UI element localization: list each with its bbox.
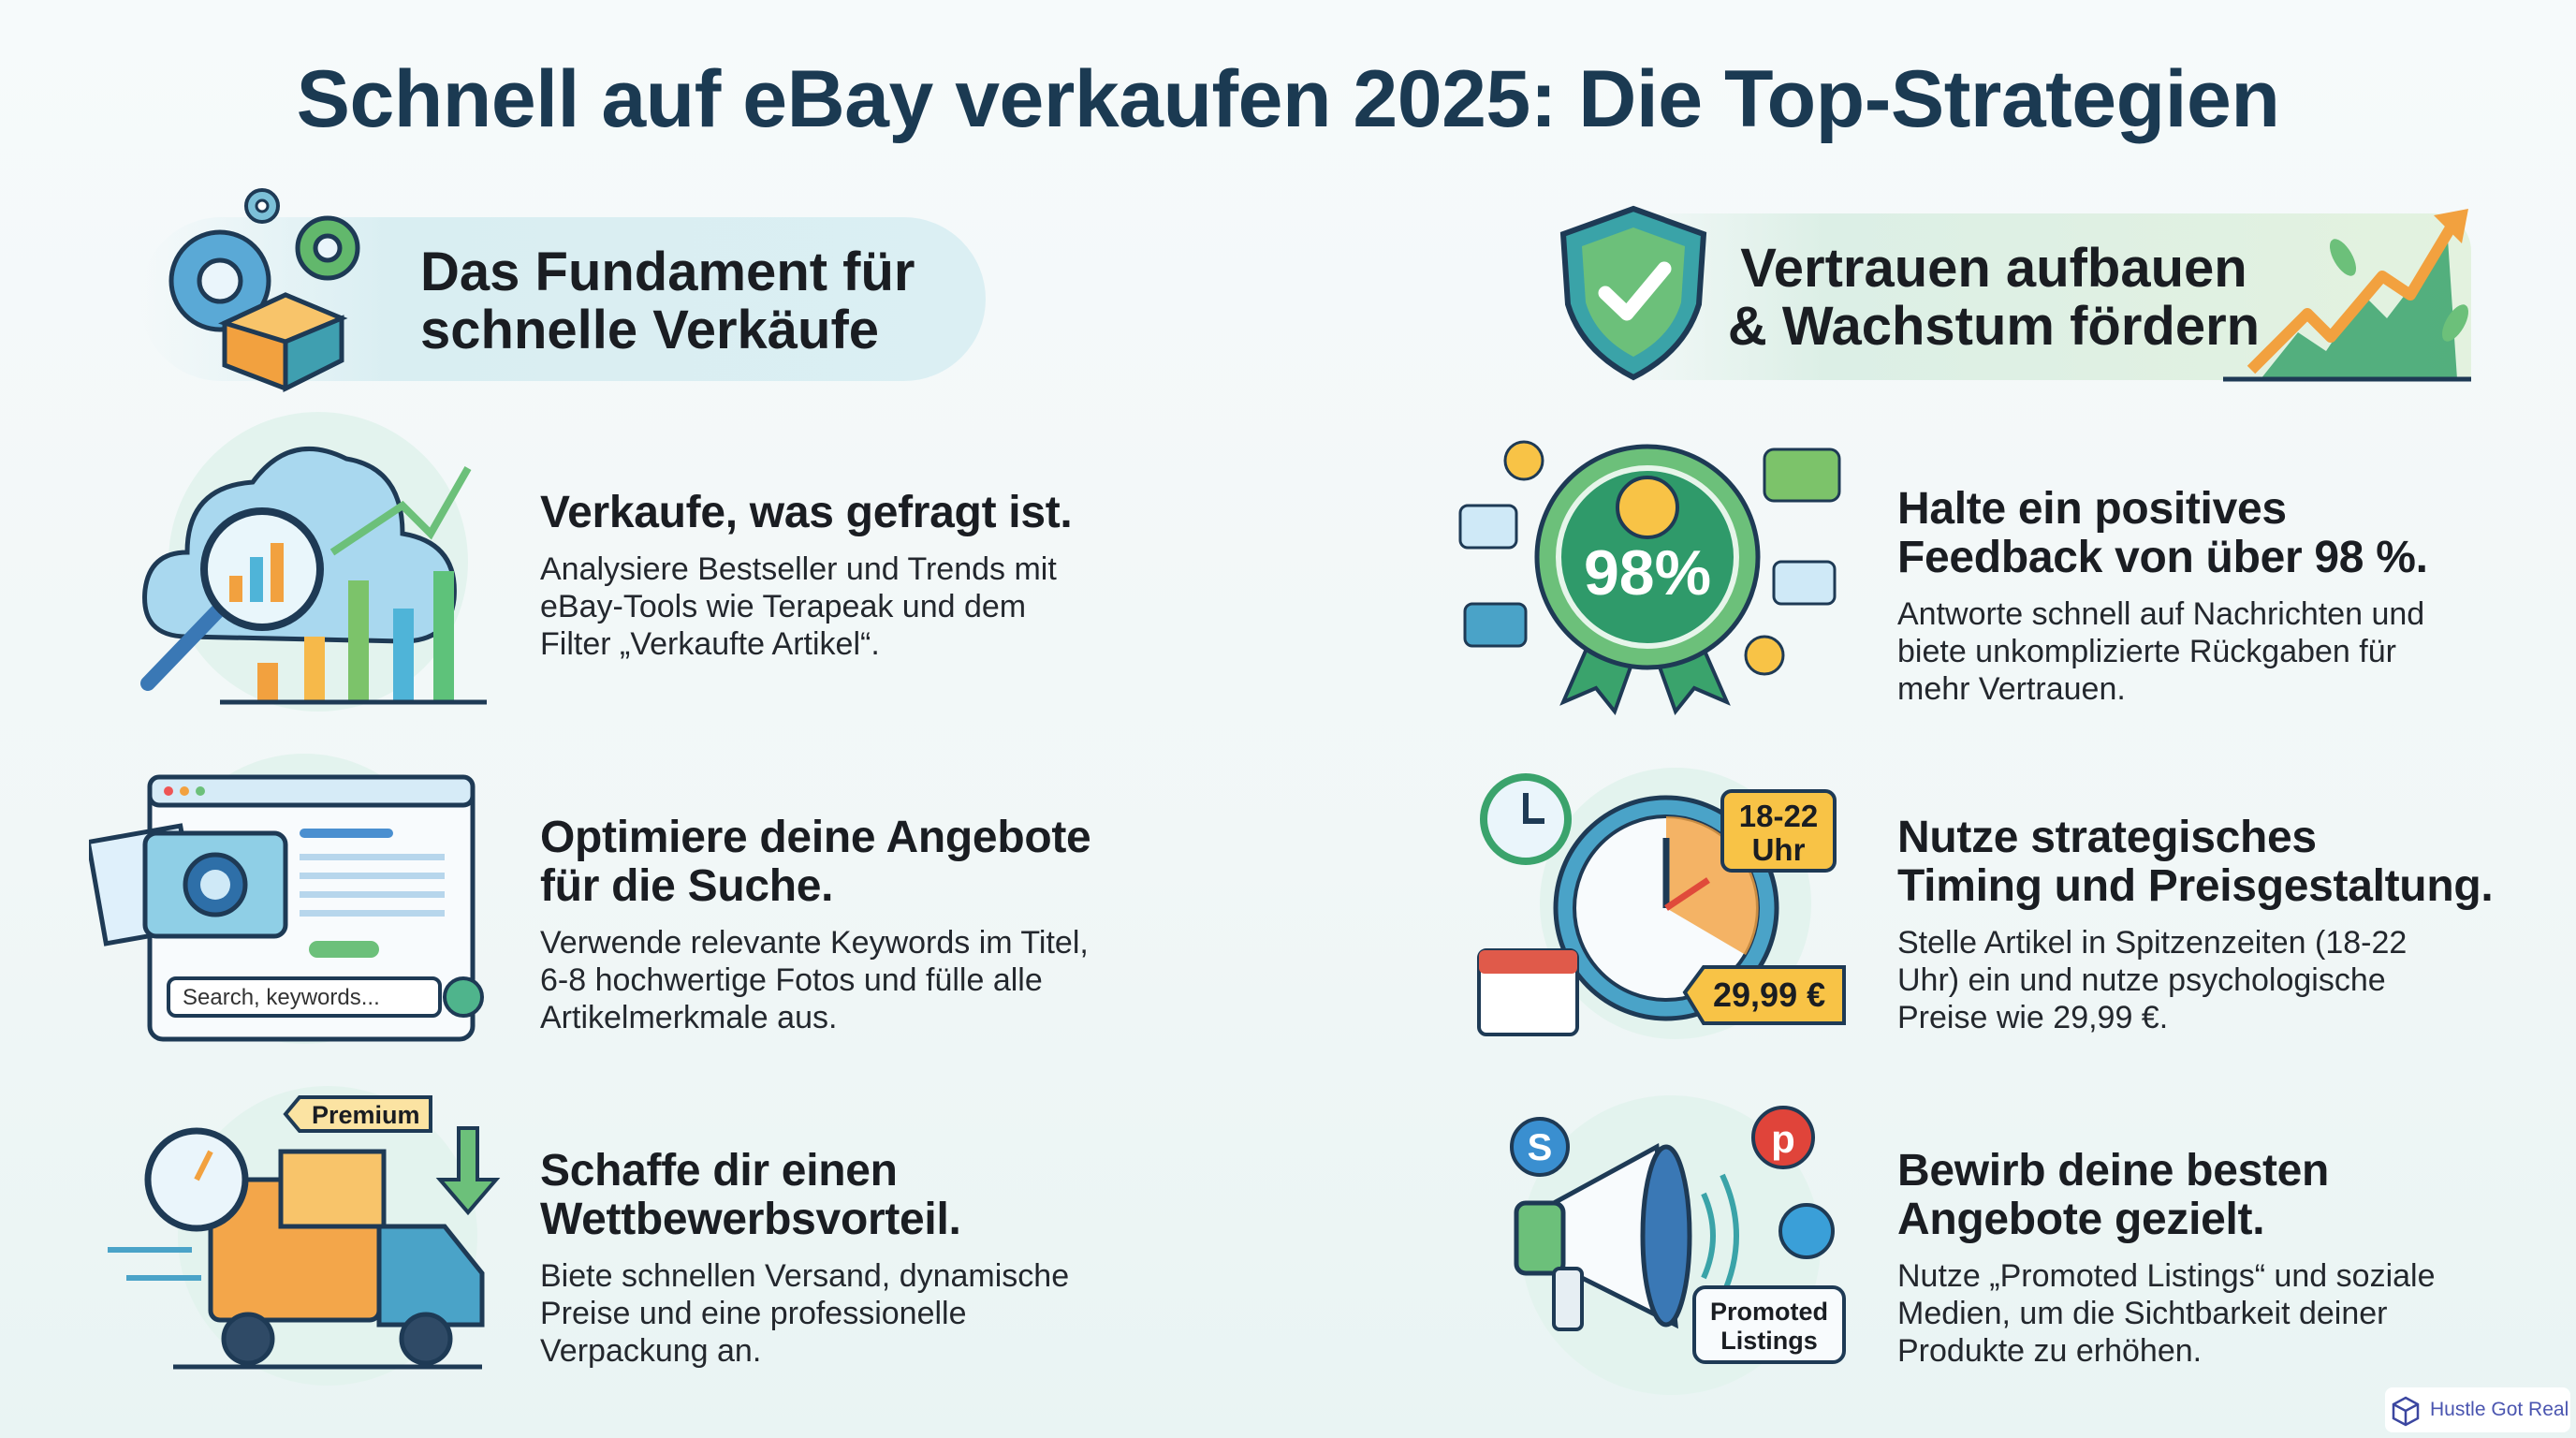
- icon: clock with time and price tags: [1477, 768, 1846, 1039]
- icon: megaphone promoted listings: Listings: [1720, 1327, 1818, 1355]
- row 3 right: Bewirb: [1897, 1146, 2436, 1369]
- body: Preise wie 29,99 €.: [1897, 1000, 2168, 1035]
- body: Nutze „Promoted Listings“ und soziale: [1897, 1258, 2436, 1294]
- row 2 left: Optimiere: [540, 813, 1090, 1035]
- body: Biete schnellen Versand, dynamische: [540, 1258, 1069, 1294]
- icon: 98% rosette: [1458, 440, 1840, 715]
- icon: delivery truck with stopwatch: [108, 1086, 500, 1369]
- body: Verwende relevante Keywords im Titel,: [540, 925, 1089, 961]
- heading text: Vertrauen aufbauen: [1728, 238, 2260, 357]
- heading text: Das Fundament: [420, 242, 915, 360]
- body: Artikelmerkmale aus.: [540, 1000, 837, 1035]
- icon: clock with time and price tags: 29,99 €: [1713, 976, 1825, 1014]
- row 2 right: Nutze Timing: [1897, 813, 2493, 1035]
- row 1 left: Verkaufe: [540, 488, 1072, 662]
- body: Medien, um die Sichtbarkeit deiner: [1897, 1296, 2387, 1331]
- heading: [540, 813, 1090, 911]
- row 3 left: Schaffe: [540, 1146, 1069, 1369]
- body: [540, 1258, 1069, 1369]
- heading: Timing und Preisgestaltung.: [1897, 861, 2493, 911]
- watermark text: Hustle Got Real: [2430, 1399, 2569, 1420]
- heading: Schaffe dir einen: [540, 1146, 898, 1196]
- icon: clock with time and price tags: 18-22: [1739, 799, 1818, 833]
- body: Uhr) ein und nutze psychologische: [1897, 962, 2386, 998]
- icon: clock with time and price tags: Uhr: [1752, 832, 1806, 867]
- body: Verpackung an.: [540, 1333, 761, 1369]
- body: [1897, 1258, 2436, 1369]
- body: [1897, 925, 2407, 1035]
- heading: für die Suche.: [540, 861, 833, 911]
- header: right pill: [1610, 213, 2471, 380]
- heading: [1897, 813, 2493, 911]
- icon: megaphone promoted listings: p: [1771, 1117, 1795, 1161]
- heading text: Das Fundament: schnelle Verkäufe: [420, 300, 879, 360]
- heading: Wettbewerbsvorteil.: [540, 1195, 961, 1244]
- icon: 98% rosette: 98%: [1584, 537, 1711, 609]
- heading: Verkaufe, was gefragt ist.: [540, 488, 1072, 537]
- body: [1897, 596, 2424, 707]
- heading: [540, 1146, 961, 1244]
- heading text: Vertrauen aufbauen: Vertrauen aufbauen: [1740, 238, 2247, 299]
- heading: [1897, 484, 2428, 582]
- icon: megaphone promoted listings: S: [1528, 1127, 1552, 1168]
- icon: shield: [1559, 206, 1707, 380]
- body: Produkte zu erhöhen.: [1897, 1333, 2202, 1369]
- body: [540, 551, 1057, 662]
- body: Preise und eine professionelle: [540, 1296, 967, 1331]
- heading text: Das Fundament: Das Fundament für: [420, 242, 915, 302]
- icon: megaphone promoted listings: [1510, 1095, 1846, 1364]
- row 1 right: Halte: [1897, 484, 2428, 707]
- body: Analysiere Bestseller und Trends mit: [540, 551, 1057, 587]
- body: Antworte schnell auf Nachrichten und: [1897, 596, 2424, 632]
- body: Stelle Artikel in Spitzenzeiten (18-22: [1897, 925, 2407, 961]
- heading: Halte ein positives: [1897, 484, 2287, 534]
- body: 6-8 hochwertige Fotos und fülle alle: [540, 962, 1043, 998]
- watermark badge: [2385, 1387, 2570, 1432]
- heading text: Vertrauen aufbauen: & Wachstum fördern: [1728, 296, 2260, 357]
- icon: cloud search with bar chart: [140, 412, 487, 712]
- icon: cube: [2393, 1397, 2419, 1427]
- body: eBay-Tools wie Terapeak und dem: [540, 589, 1026, 624]
- icon: delivery truck with stopwatch: Premium: [312, 1101, 420, 1129]
- heading: Nutze strategisches: [1897, 813, 2317, 862]
- title: Schnell auf eBay verkaufen 2025: Die Top-Strategien: [297, 54, 2279, 144]
- icon: browser listing with camera: Search, keywords...: [183, 985, 380, 1010]
- body: Filter „Verkaufte Artikel“.: [540, 626, 880, 662]
- body: [540, 925, 1089, 1035]
- heading: Bewirb deine besten: [1897, 1146, 2329, 1196]
- icon: megaphone promoted listings: Promoted: [1710, 1298, 1828, 1326]
- heading: Feedback von über 98 %.: [1897, 533, 2428, 582]
- icon: browser listing with camera: [89, 754, 484, 1044]
- body: mehr Vertrauen.: [1897, 671, 2126, 707]
- icon: gears and box: [168, 188, 359, 392]
- header: left pill: [139, 217, 986, 381]
- heading: [1897, 1146, 2329, 1244]
- heading: Angebote gezielt.: [1897, 1195, 2264, 1244]
- icon: growth chart: [2223, 209, 2471, 382]
- heading: Optimiere deine Angebote: [540, 813, 1090, 862]
- body: biete unkomplizierte Rückgaben für: [1897, 634, 2396, 669]
